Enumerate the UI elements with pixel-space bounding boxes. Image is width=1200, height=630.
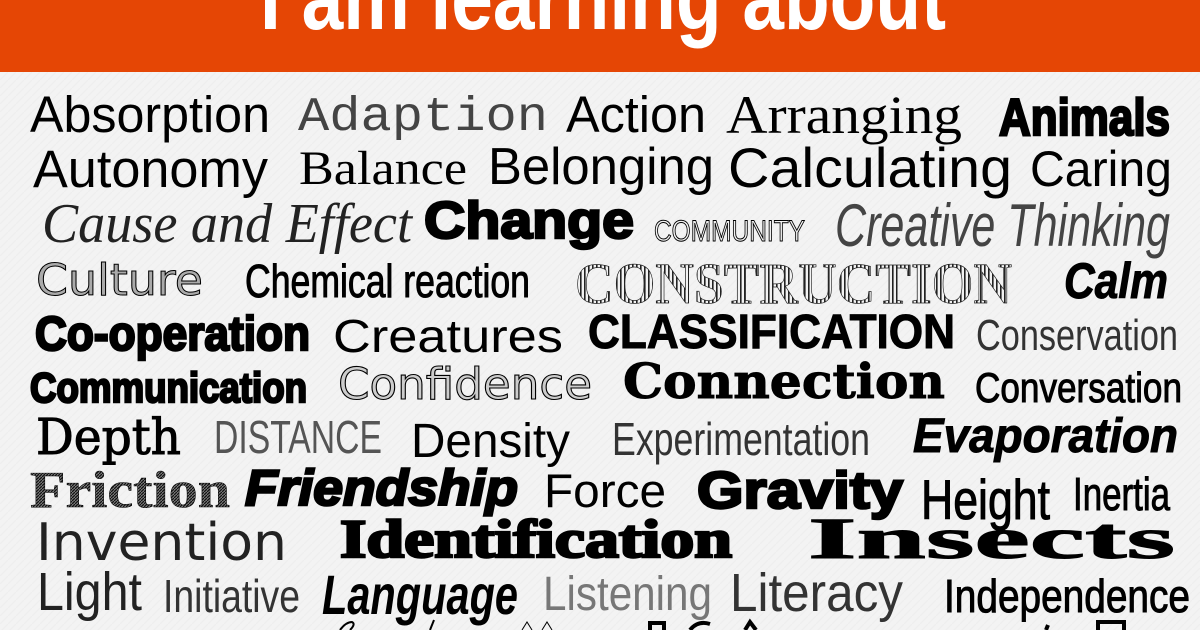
row 3 [42, 192, 1170, 259]
row 10: Light [37, 562, 142, 622]
row 8 [30, 460, 1170, 531]
row 8: Force [544, 464, 666, 517]
row 3: COMMUNITY [654, 215, 805, 248]
row 6: Confidence [338, 359, 592, 410]
row 7: Depth [36, 408, 181, 466]
row 7: Density [411, 415, 570, 468]
row 2: Balance [299, 142, 467, 195]
row 6 [30, 354, 1182, 411]
row 1: Absorption [30, 86, 270, 143]
row 10: Literacy [730, 563, 903, 623]
row 8: Friction [30, 462, 230, 519]
row 5 [35, 306, 1178, 362]
row 5: Co-operation [35, 308, 310, 361]
row 8: Gravity [697, 462, 903, 520]
row 10: Initiative [163, 570, 300, 622]
row 5: CLASSIFICATION [588, 306, 955, 359]
row 10: Language [322, 563, 518, 626]
row 2: Caring [1030, 141, 1172, 197]
row 5: Creatures [333, 310, 563, 362]
row 9 [36, 506, 1175, 573]
row 7: Evaporation [913, 410, 1178, 463]
row 2: Autonomy [33, 140, 268, 199]
row 10 [37, 562, 1190, 626]
row 6: Connection [623, 354, 945, 410]
row 2 [33, 136, 1172, 199]
row 7: DISTANCE [214, 411, 382, 463]
row 1: Arranging [726, 85, 962, 145]
row 4: Chemical reaction [245, 255, 530, 307]
row 3: Change [424, 192, 634, 250]
header band [0, 0, 1200, 72]
row 1: Action [566, 86, 706, 143]
row 4 [36, 251, 1168, 316]
row 8: Friendship [245, 460, 518, 516]
row 6: Communication [30, 364, 307, 411]
row 10: Listening [543, 568, 712, 621]
row 9: Invention [36, 513, 287, 573]
row 1: Adaption [298, 91, 548, 145]
row 8: Height [921, 468, 1050, 531]
cropped tops of next row of words [340, 620, 1124, 630]
row 3: Cause and Effect [42, 193, 413, 255]
row 9: Identification [340, 509, 732, 569]
row 9: Insects [808, 506, 1175, 571]
row 4: Culture [36, 255, 203, 306]
row 2: Calculating [728, 136, 1012, 199]
row 4: Calm [1064, 253, 1168, 309]
row 4: CONSTRUCTION [575, 251, 1012, 316]
row 8: Inertia [1073, 468, 1170, 520]
row 7: Experimentation [612, 413, 870, 465]
row 2: Belonging [488, 138, 714, 196]
row 7 [36, 408, 1178, 468]
row 1: Animals [999, 89, 1170, 147]
row 1 [30, 85, 1170, 147]
